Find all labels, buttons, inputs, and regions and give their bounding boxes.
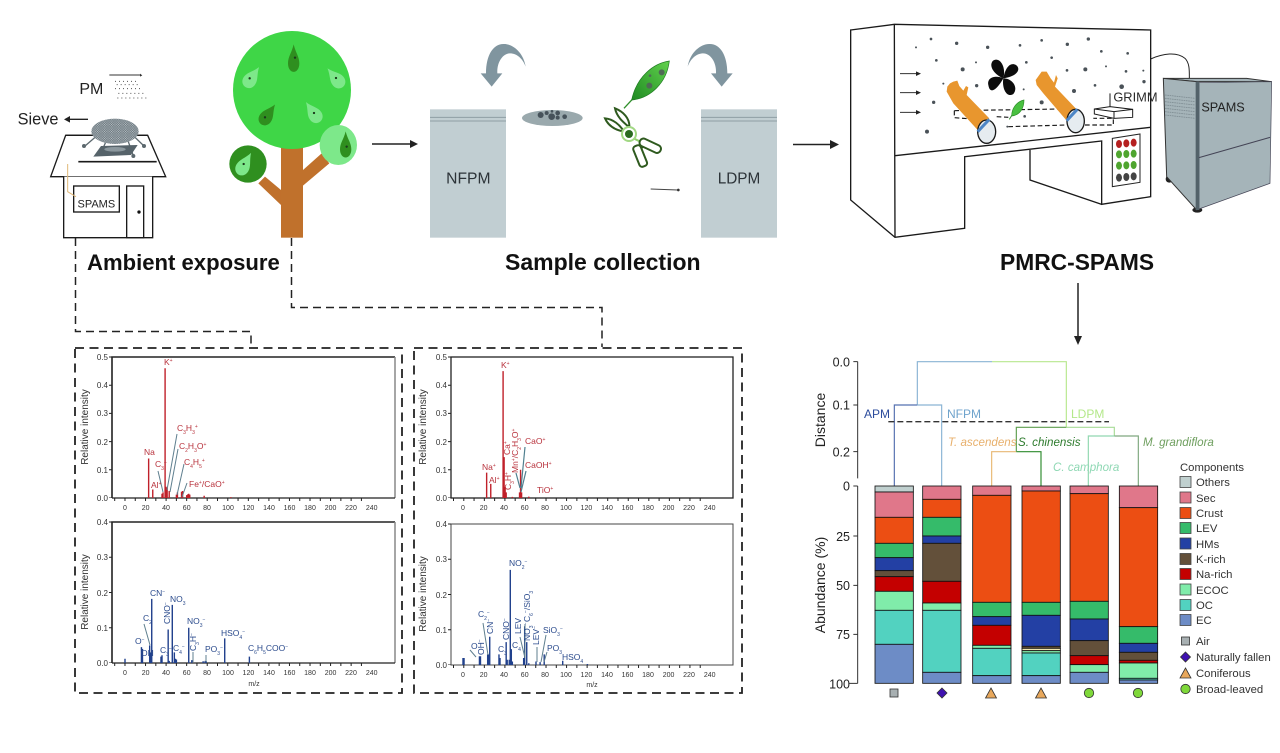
chart: right positive spectrum: CaO+ — [525, 436, 545, 446]
chart: left positive spectrum: 120 — [243, 505, 254, 512]
arrow: curved to LDPM — [688, 44, 733, 87]
chart: left negative spectrum: PO3− — [205, 644, 223, 657]
bag: NFPM: NFPM — [446, 170, 491, 187]
chart: left positive spectrum: 100 — [222, 505, 234, 512]
chart: left negative spectrum — [80, 518, 395, 688]
chart: right positive spectrum: Al+ — [489, 475, 500, 485]
chart: stacked abundance bars — [812, 480, 1158, 698]
chart: right negative spectrum: NO2− — [509, 558, 528, 571]
chart: left negative spectrum: 0.0 — [97, 659, 109, 668]
chart: left negative spectrum: O− — [135, 636, 145, 646]
chart: left negative spectrum: HSO4− — [221, 628, 245, 641]
chart: left negative spectrum: NO3 — [170, 594, 186, 607]
legend: Sec — [1196, 493, 1216, 505]
panel: ambient exposure — [18, 31, 357, 275]
roof — [51, 135, 166, 177]
chart: right positive spectrum: Ca+ — [502, 441, 512, 455]
dashed tray — [954, 109, 1113, 127]
bar: NFPM — [923, 486, 961, 683]
title: ambient exposure: Ambient exposure — [87, 250, 280, 275]
legend: Others — [1196, 477, 1230, 489]
chart: left negative spectrum: 140 — [263, 670, 275, 677]
chart: left positive spectrum: 0.2 — [97, 438, 109, 447]
bag: NFPM — [430, 109, 506, 238]
chart: right positive spectrum: C3H+ — [503, 472, 516, 490]
chart: left negative spectrum: NO3− — [187, 616, 206, 629]
icon: pruning scissors — [605, 108, 662, 168]
chart: dendrogram: C. camphora — [1053, 461, 1120, 474]
chart: left positive spectrum: 200 — [325, 505, 337, 512]
chart: right negative spectrum: 140 — [601, 672, 613, 679]
chart: left positive spectrum: 80 — [203, 505, 211, 512]
chart: right negative spectrum: 180 — [642, 672, 654, 679]
chart: left negative spectrum: 220 — [345, 670, 357, 677]
chart: right negative spectrum: 0.0 — [436, 661, 448, 670]
SPAMS window — [74, 186, 119, 212]
chart: left positive spectrum: 40 — [162, 505, 170, 512]
title: PMRC-SPAMS: PMRC-SPAMS — [1000, 249, 1154, 275]
chart: left negative spectrum: C3H− — [188, 633, 201, 651]
chart: left negative spectrum: 0.1 — [97, 624, 109, 633]
panel: sample collection — [430, 44, 777, 275]
chart: right negative spectrum: SiO3− — [543, 625, 563, 638]
label: Sieve: Sieve — [18, 110, 59, 128]
chart: right negative spectrum: CN− — [485, 619, 495, 634]
inlet tube — [68, 164, 76, 197]
chart: right positive spectrum: Relative intensity — [418, 389, 429, 465]
chart: right positive spectrum: 240 — [704, 505, 716, 512]
SPAMS instrument — [1163, 78, 1272, 213]
chart: left negative spectrum: Relative intensity — [80, 554, 91, 630]
sieve on roof — [66, 119, 148, 158]
chart: right positive spectrum: Na+ — [482, 462, 496, 472]
chart: left positive spectrum — [80, 353, 395, 512]
legend: Air — [1196, 636, 1210, 648]
chart: right negative spectrum: C6−/SiO3 — [522, 591, 535, 622]
icon: sample leaf — [1009, 100, 1024, 119]
bar: Air — [875, 486, 913, 683]
chart: right negative spectrum: CNO− — [501, 618, 511, 640]
chart: right positive spectrum: 120 — [581, 505, 592, 512]
chart: left negative spectrum: 60 — [183, 670, 191, 677]
chart: left negative spectrum: 80 — [203, 670, 211, 677]
door — [127, 186, 144, 238]
chart: left negative spectrum: C2 — [143, 613, 152, 626]
legend: Broad-leaved — [1196, 684, 1263, 696]
chart: right positive spectrum: 180 — [642, 505, 654, 512]
chart: right positive spectrum: TiO+ — [537, 485, 553, 495]
chart: right negative spectrum: 160 — [622, 672, 633, 679]
chart: right negative spectrum: 100 — [560, 672, 572, 679]
chart: right negative spectrum — [418, 520, 733, 689]
icon: leaf — [624, 61, 669, 108]
chart: left negative spectrum: 180 — [304, 670, 316, 677]
panel: left spectra box — [75, 348, 402, 693]
chart: right positive spectrum: 20 — [480, 505, 488, 512]
chart: dendrogram: 0.0 — [833, 356, 850, 370]
chart: right negative spectrum: 20 — [480, 672, 488, 679]
GRIMM device: GRIMM — [1113, 90, 1158, 105]
SPAMS window: SPAMS — [78, 199, 115, 211]
legend: OC — [1196, 600, 1213, 612]
chamber housing — [851, 24, 1151, 237]
chart: left negative spectrum: CN− — [150, 588, 165, 598]
chart: right positive spectrum: 0.5 — [436, 353, 448, 362]
icon: falling particles — [109, 74, 147, 98]
chart: right positive spectrum: 100 — [560, 505, 572, 512]
chart: right negative spectrum: HSO4 — [562, 652, 583, 665]
chart: left positive spectrum: C2H3O+ — [179, 441, 206, 454]
chart: left negative spectrum: 200 — [325, 670, 337, 677]
chart: stacked abundance bars: 25 — [836, 530, 850, 544]
legend: LEV — [1196, 523, 1218, 535]
chart: right negative spectrum: m/z — [586, 682, 598, 689]
legend: K-rich — [1196, 554, 1226, 566]
chart: left positive spectrum: 0.1 — [97, 466, 109, 475]
chart: right negative spectrum: 0 — [461, 672, 465, 679]
chart: left negative spectrum: m/z — [248, 681, 260, 688]
chart: left negative spectrum: 0.3 — [97, 553, 109, 562]
chart: left positive spectrum: 20 — [142, 505, 150, 512]
panel: PMRC-SPAMS — [851, 24, 1272, 275]
dashed connector: house to left spectra — [76, 238, 251, 347]
chart: right negative spectrum: C2− — [478, 609, 490, 622]
chart: left positive spectrum: 0.0 — [97, 494, 109, 503]
legend: Components — [1180, 462, 1244, 474]
chart: right positive spectrum: 160 — [622, 505, 633, 512]
chart: right positive spectrum: 0 — [461, 505, 465, 512]
chart: left negative spectrum: C3− — [160, 645, 172, 658]
chart: dendrogram: NFPM — [947, 407, 981, 421]
chart: left negative spectrum: 0.2 — [97, 589, 109, 598]
chart: left negative spectrum: OH — [141, 648, 154, 658]
legend: EC — [1196, 615, 1212, 627]
bar type markers — [890, 688, 1143, 698]
legend: ECOC — [1196, 585, 1229, 597]
chart: left negative spectrum: 40 — [162, 670, 170, 677]
chart: right negative spectrum: 0.2 — [436, 591, 448, 600]
chart: left positive spectrum: C3+ — [155, 459, 167, 472]
chart: stacked abundance bars: 100 — [829, 678, 850, 692]
chart: right positive spectrum: 0.4 — [436, 381, 448, 390]
bag: LDPM — [701, 109, 777, 238]
chart: dendrogram: APM — [864, 407, 890, 421]
SPAMS instrument: SPAMS — [1201, 101, 1245, 115]
chart: left positive spectrum: 0 — [123, 505, 127, 512]
chart: dendrogram: 0.2 — [833, 446, 850, 460]
chart: right positive spectrum: K+ — [501, 360, 510, 370]
chart: right negative spectrum: C3 — [498, 644, 507, 657]
chart: stacked abundance bars: 0 — [843, 480, 850, 494]
title: sample collection: Sample collection — [505, 249, 701, 275]
icon: right glove — [1036, 72, 1084, 133]
chart: right negative spectrum: 240 — [704, 672, 716, 679]
chart: left negative spectrum: 0 — [123, 670, 127, 677]
chart: right negative spectrum: 0.3 — [436, 555, 448, 564]
bar: C. camphora — [1070, 486, 1108, 683]
chart: right negative spectrum: C4 — [512, 640, 521, 653]
chart: dendrogram: LDPM — [1071, 407, 1104, 421]
arrow: tree to samples — [372, 140, 418, 148]
legend: Coniferous — [1196, 668, 1251, 680]
chart: left positive spectrum: Al+ — [151, 480, 162, 490]
chart: left negative spectrum: 120 — [243, 670, 254, 677]
chart: dendrogram — [812, 356, 1214, 486]
label: PM: PM — [79, 81, 103, 98]
chart: left negative spectrum: 0.4 — [97, 518, 109, 527]
dashed connector: tree to right spectra — [292, 238, 602, 347]
icon: left glove — [947, 81, 996, 143]
icon: house with sieve — [18, 74, 166, 238]
chart: left negative spectrum: 100 — [222, 670, 234, 677]
chart: right negative spectrum: LEV — [513, 618, 523, 634]
chart: left positive spectrum: C3H3+ — [177, 423, 198, 436]
panel: right spectra box — [414, 348, 742, 693]
chart: right positive spectrum: 0.2 — [436, 438, 448, 447]
chart: right positive spectrum: 60 — [521, 505, 529, 512]
chart: stacked abundance bars: Abundance (%) — [812, 537, 828, 633]
chart: left positive spectrum: 160 — [284, 505, 295, 512]
chart: dendrogram: M. grandiflora — [1143, 436, 1214, 449]
chart: left positive spectrum: 140 — [263, 505, 275, 512]
icon: fan — [988, 60, 1018, 95]
chart: left negative spectrum: C6H5COO− — [248, 643, 288, 656]
chart: left positive spectrum: 0.5 — [97, 353, 109, 362]
chart: right positive spectrum: 220 — [683, 505, 695, 512]
chart: right positive spectrum: 0.0 — [436, 494, 448, 503]
legend: HMs — [1196, 539, 1220, 551]
house body — [64, 177, 153, 238]
small pointer — [651, 189, 680, 191]
chart: right positive spectrum: 40 — [500, 505, 508, 512]
chart: dendrogram: T. ascendens — [948, 436, 1017, 449]
control panel — [1112, 134, 1140, 187]
chart: left positive spectrum: 0.3 — [97, 409, 109, 418]
chart: left negative spectrum: 160 — [284, 670, 295, 677]
chart: dendrogram: Distance — [812, 393, 828, 447]
chart: right positive spectrum — [418, 353, 733, 512]
chart: right negative spectrum: O — [471, 641, 478, 651]
chart: left positive spectrum: 240 — [366, 505, 378, 512]
GRIMM device — [1094, 90, 1158, 118]
chart: right negative spectrum: 120 — [581, 672, 592, 679]
chart: left negative spectrum: 20 — [142, 670, 150, 677]
chart: left positive spectrum: 60 — [183, 505, 191, 512]
chart: right negative spectrum: 0.1 — [436, 626, 448, 635]
arrow: curved to NFPM — [481, 44, 526, 87]
chart: left positive spectrum: Fe+/CaO+ — [189, 479, 225, 489]
bag: LDPM: LDPM — [718, 170, 760, 187]
chart: left negative spectrum: 240 — [366, 670, 378, 677]
suspended particles — [915, 37, 1146, 134]
chart: left positive spectrum: C4H5+ — [184, 457, 205, 470]
chart: right positive spectrum: 140 — [601, 505, 613, 512]
chart: right negative spectrum: LEV− — [531, 626, 541, 645]
chart: left positive spectrum: 220 — [345, 505, 357, 512]
chart: right negative spectrum: Relative intensity — [418, 556, 429, 632]
legend: Crust — [1196, 508, 1224, 520]
chart: left positive spectrum: K+ — [164, 357, 173, 367]
chart: right negative spectrum: OH− — [476, 639, 486, 655]
icon: tree — [229, 31, 357, 238]
chart: right negative spectrum: PO3 — [547, 643, 562, 656]
chart: right positive spectrum: 0.3 — [436, 409, 448, 418]
bar: M. grandiflora — [1119, 486, 1158, 683]
arrow: samples to chamber — [793, 140, 839, 149]
chart: stacked abundance bars: 50 — [836, 579, 850, 593]
chart: right negative spectrum: NO3− — [522, 622, 535, 641]
arrows: airflow — [900, 71, 921, 115]
chart: right positive spectrum: 200 — [663, 505, 675, 512]
bar: S. chinensis — [1022, 486, 1060, 683]
chart: right negative spectrum: 0.4 — [436, 520, 448, 529]
chart: left negative spectrum: C4− — [173, 643, 185, 656]
icon: dish with particles — [522, 110, 583, 126]
chart: right negative spectrum: 60 — [521, 672, 529, 679]
chart: dendrogram: 0.1 — [833, 398, 850, 412]
chart: right negative spectrum: 80 — [541, 672, 549, 679]
chart: left positive spectrum: Na — [144, 447, 155, 457]
legend: Naturally fallen — [1196, 652, 1271, 664]
arrow: PMRC-SPAMS to dendrogram — [1074, 283, 1082, 345]
arrow: to sieve — [64, 116, 88, 123]
chart: left negative spectrum: CNO− — [162, 602, 172, 624]
chart: right positive spectrum: 80 — [541, 505, 549, 512]
chart: left positive spectrum: Relative intensity — [80, 389, 91, 465]
chart: right negative spectrum: 200 — [663, 672, 675, 679]
connecting tube — [1151, 54, 1189, 80]
chart: dendrogram: S. chinensis — [1018, 436, 1081, 449]
bar: T. ascendens — [973, 486, 1011, 683]
legend: Na-rich — [1196, 569, 1232, 581]
chart: left positive spectrum: 0.4 — [97, 381, 109, 390]
chart: right negative spectrum: 40 — [500, 672, 508, 679]
chart: right positive spectrum: 0.1 — [436, 466, 448, 475]
chart: right negative spectrum: 220 — [683, 672, 695, 679]
legend — [1180, 462, 1271, 696]
chart: left positive spectrum: 180 — [304, 505, 316, 512]
chart: stacked abundance bars: 75 — [836, 628, 850, 642]
chart: right positive spectrum: CaOH+ — [525, 460, 552, 470]
chart: right positive spectrum: Mn+/C2H3O+ — [510, 428, 523, 473]
